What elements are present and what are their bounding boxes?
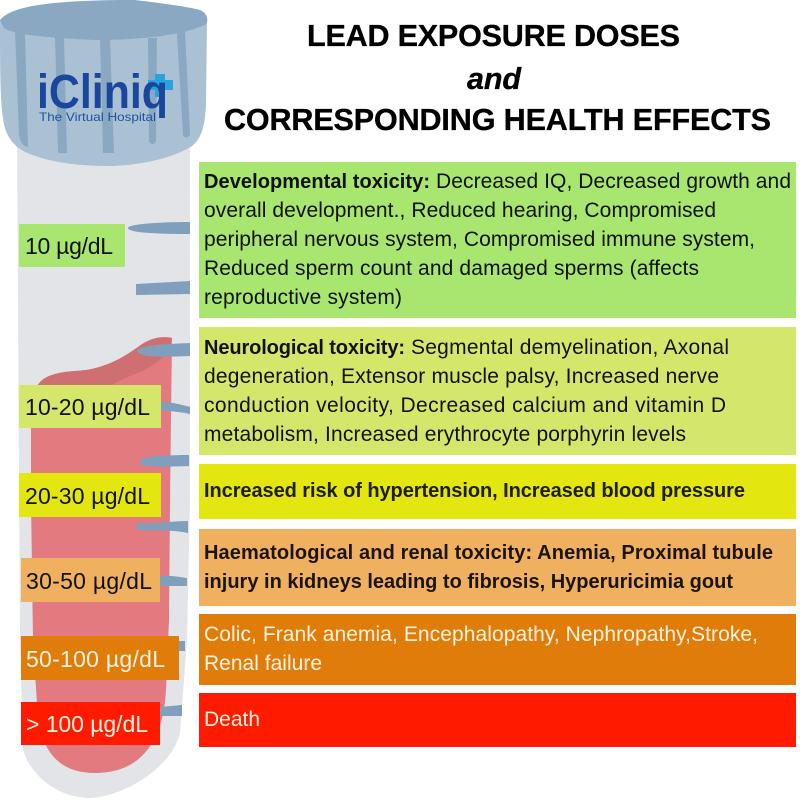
cap ribs	[15, 30, 190, 153]
dose label: 10-20	[19, 385, 161, 428]
panel: developmental toxicity: peripheral nervous system, Compromised immune system,	[204, 228, 755, 251]
panel: hypertension: Increased risk of hypertension, Increased blood pressure	[204, 480, 745, 502]
panel: death	[199, 693, 796, 747]
cap top ellipse	[0, 0, 207, 40]
blood liquid	[31, 337, 172, 773]
panel: neurological toxicity: Segmental demyelination, Axonal	[411, 336, 729, 359]
title	[224, 19, 771, 137]
panel: developmental toxicity: Reduced sperm count and damaged sperms (affects	[204, 257, 699, 280]
dose label: 20-30	[19, 473, 161, 517]
panel: death: Death	[204, 708, 260, 731]
panel: haematological and renal toxicity: Haematological and renal toxicity: Anemia, Proximal tubule	[204, 542, 773, 564]
title: LEAD EXPOSURE DOSES	[307, 19, 680, 53]
cap body	[0, 18, 207, 166]
title: CORRESPONDING HEALTH EFFECTS	[224, 103, 771, 137]
panel: neurological toxicity: conduction velocity, Decreased calcium and vitamin D	[204, 394, 726, 417]
panel: developmental toxicity: Decreased IQ, Decreased growth and	[436, 170, 791, 193]
measurement ticks	[128, 222, 190, 716]
panel: neurological toxicity	[199, 327, 796, 455]
panel: developmental toxicity: overall development., Reduced hearing, Compromised	[204, 199, 716, 222]
panel: haematological and renal toxicity	[199, 529, 796, 606]
tube body	[17, 140, 190, 798]
panel: colic and organ failure	[199, 614, 796, 685]
dose label: over 100	[21, 702, 160, 745]
panel: developmental toxicity: reproductive system)	[204, 286, 402, 309]
panel: hypertension	[199, 464, 796, 519]
test tube illustration	[17, 140, 190, 798]
logo tagline: The Virtual Hospital	[39, 110, 156, 124]
cap of tube	[0, 0, 207, 166]
panel: neurological toxicity: metabolism, Increased erythrocyte porphyrin levels	[204, 423, 686, 446]
title: and	[467, 62, 522, 96]
dose label: 50-100	[21, 636, 179, 680]
blood meniscus shadow	[38, 337, 172, 390]
logo: iCliniq	[37, 66, 173, 124]
dose label: 10	[19, 224, 125, 267]
dose label: 50-100: 50-100 µg/dL	[26, 646, 165, 672]
logo wordmark: iCliniq	[37, 66, 168, 119]
panel: developmental toxicity: Developmental toxicity:	[204, 171, 430, 193]
panel: colic and organ failure: Colic, Frank anemia, Encephalopathy, Nephropathy,Stroke,	[204, 623, 758, 646]
dose label: 10: 10 µg/dL	[25, 233, 113, 259]
dose label: 10-20: 10-20 µg/dL	[25, 394, 150, 420]
dose label: over 100: > 100 µg/dL	[26, 711, 148, 737]
panel: developmental toxicity	[199, 162, 796, 318]
panel: neurological toxicity: Neurological toxicity:	[204, 337, 405, 359]
dose label: 20-30: 20-30 µg/dL	[25, 483, 150, 509]
dose label: 30-50: 30-50 µg/dL	[26, 568, 152, 594]
panel: colic and organ failure: Renal failure	[204, 652, 322, 675]
panel: neurological toxicity: degeneration, Extensor muscle palsy, Increased nerve	[204, 365, 719, 388]
panel: haematological and renal toxicity: injury in kidneys leading to fibrosis, Hyperuricimia gout	[204, 571, 733, 593]
logo plus sign	[148, 74, 173, 97]
dose label: 30-50	[21, 558, 160, 602]
